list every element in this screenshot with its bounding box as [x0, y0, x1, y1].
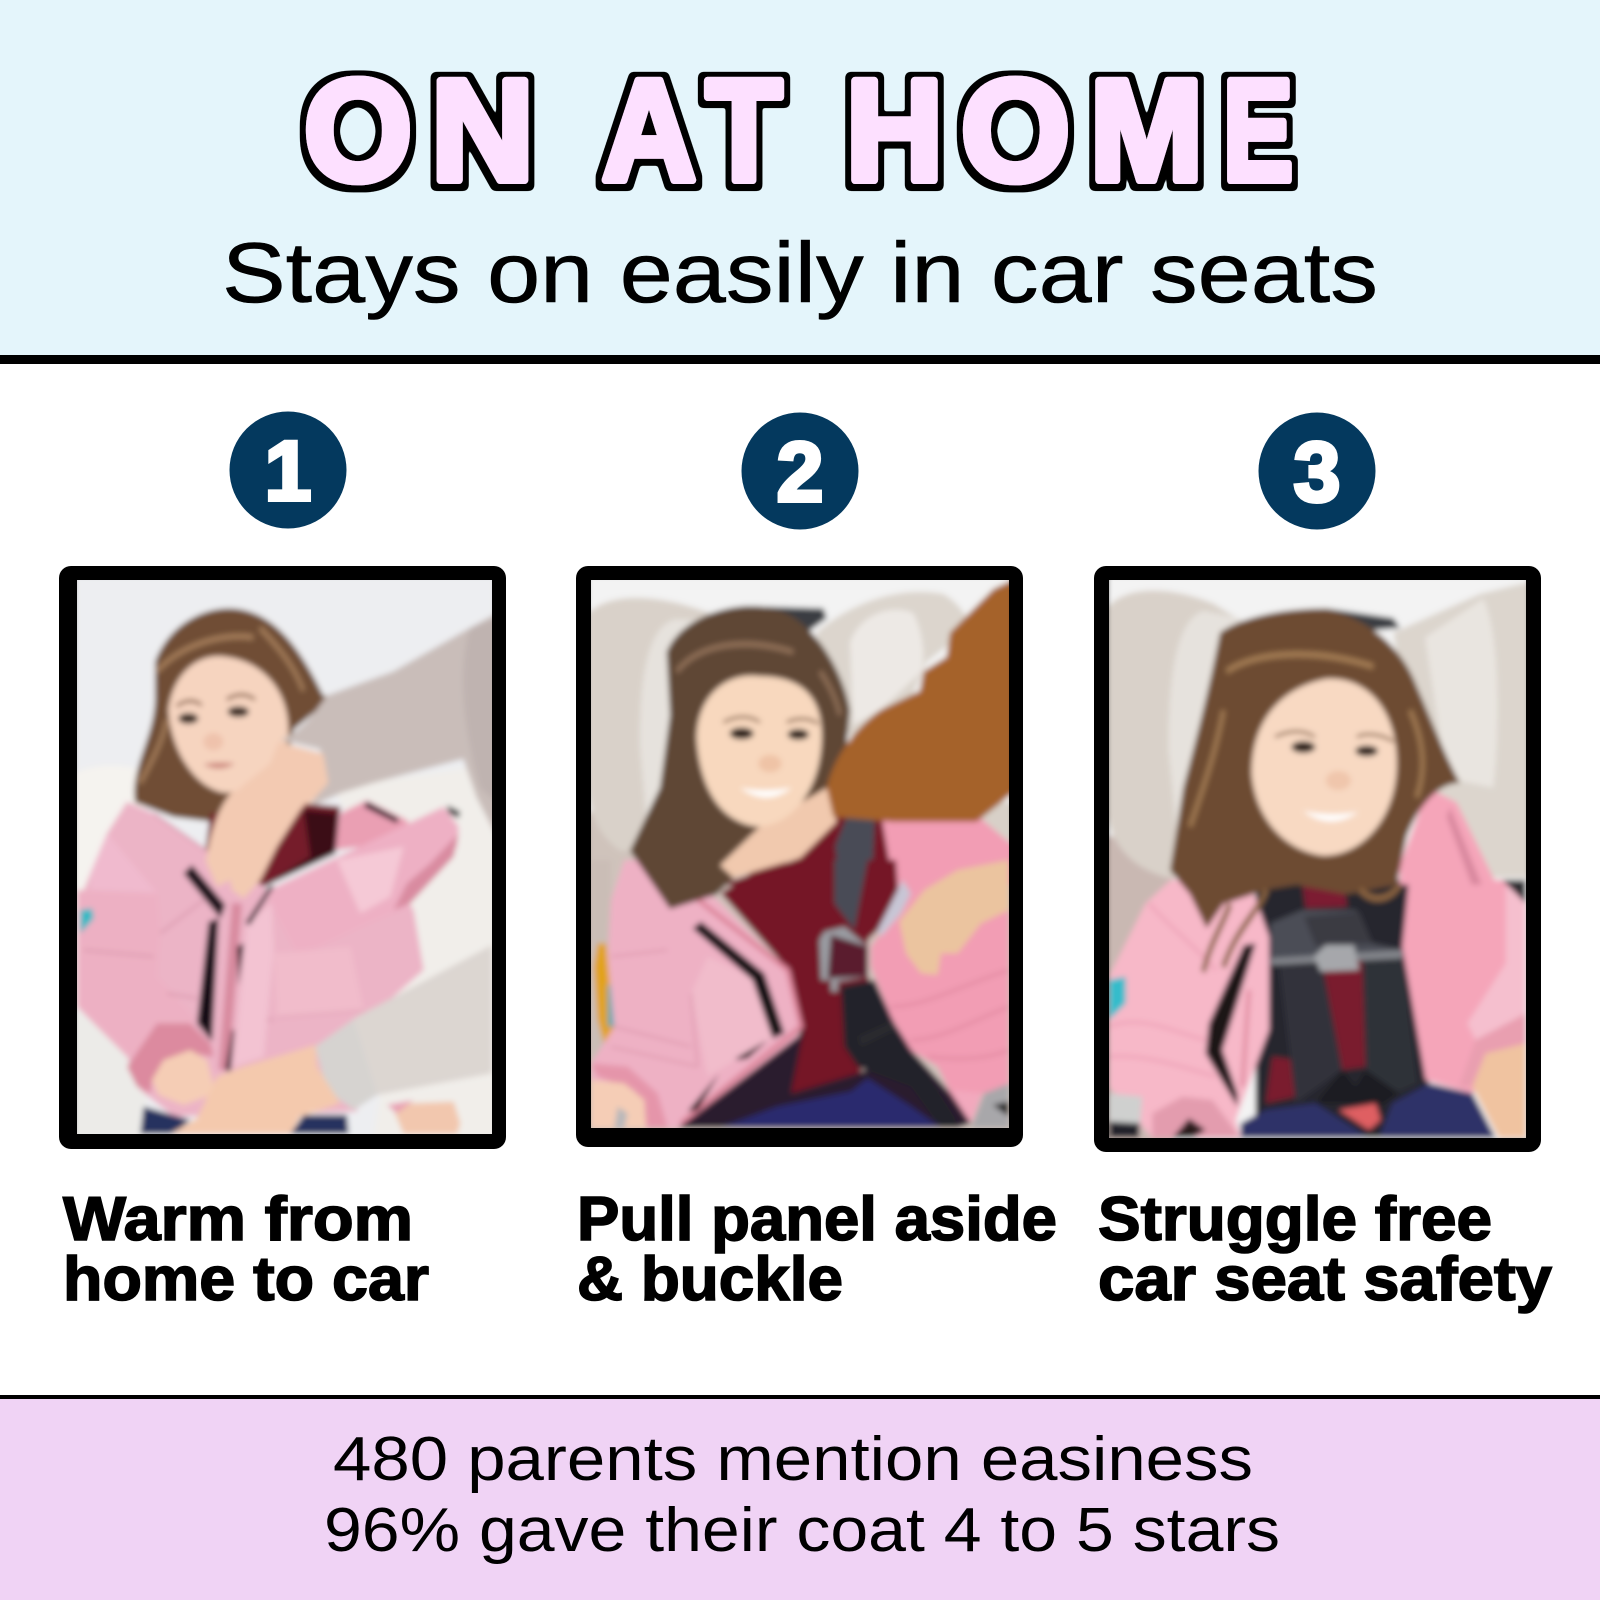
warning sticker — [594, 943, 614, 1057]
subtitle: Stays on easily in car seats — [222, 226, 1378, 321]
child hand — [1472, 1043, 1526, 1138]
child hand — [152, 1050, 215, 1105]
title: N — [431, 50, 534, 211]
footer stats text — [324, 1425, 1280, 1565]
caption: step 1 — [63, 1185, 429, 1314]
adult hand — [205, 790, 317, 898]
caption: step 2 — [577, 1185, 1057, 1314]
step 2 number badge — [742, 412, 858, 530]
child hand — [591, 1080, 646, 1128]
straps — [1279, 963, 1342, 1103]
cuff — [127, 1023, 214, 1093]
seat edge — [591, 860, 611, 1063]
buckle — [1316, 1070, 1399, 1107]
footer stats text: 96% gave their coat 4 to 5 stars — [324, 1496, 1280, 1565]
pants — [719, 1078, 941, 1128]
title: A — [602, 50, 696, 211]
right shoulder — [1400, 788, 1497, 885]
hair — [1170, 608, 1460, 928]
velcro — [688, 922, 784, 1112]
header panel — [0, 0, 1600, 356]
light sleeve — [1467, 880, 1526, 1040]
velcro strips — [184, 865, 274, 1072]
title: T — [706, 50, 782, 211]
caption: step 2: Pull panel aside — [577, 1185, 1057, 1254]
knees — [1241, 1083, 1496, 1138]
second child hand — [394, 1102, 460, 1134]
shirt — [1322, 960, 1366, 1070]
collar lining — [335, 800, 410, 850]
panel: step 1 photo frame — [59, 566, 506, 1149]
buckle — [819, 927, 868, 992]
chest clip — [1271, 910, 1402, 963]
left jacket — [1109, 880, 1269, 1138]
cuff — [591, 1063, 668, 1128]
photo: girl smiling buckled in car seat — [1107, 575, 1530, 1146]
coat body — [77, 802, 424, 1117]
step 1 number badge — [230, 412, 346, 528]
face — [1252, 679, 1397, 856]
lower sweater arm — [352, 946, 492, 1096]
header divider — [0, 355, 1600, 364]
caption: step 3 — [1098, 1185, 1553, 1314]
footer stats text: 480 parents mention easiness — [333, 1425, 1253, 1494]
hair — [630, 606, 850, 909]
title: O — [304, 50, 412, 211]
right coat base — [1402, 880, 1526, 1093]
coat front panel — [234, 903, 274, 1067]
step 1 number badge: 1 — [265, 424, 311, 518]
footer divider — [0, 1395, 1600, 1399]
title — [304, 50, 1293, 211]
title: O — [961, 50, 1070, 211]
photo: parent zipping girl's pink coat — [73, 575, 497, 1142]
red shirt — [721, 860, 903, 1097]
caption: step 1: Warm from — [63, 1185, 413, 1254]
caption: step 2: & buckle — [577, 1245, 843, 1314]
title: M — [1090, 50, 1203, 211]
face — [168, 656, 288, 793]
panel flap — [269, 805, 461, 926]
brown sleeve — [827, 579, 1013, 822]
panel: step 2 photo frame — [576, 566, 1023, 1147]
velcro — [1206, 943, 1256, 1107]
harness base — [1256, 880, 1429, 1138]
pants — [140, 1107, 349, 1134]
forearm — [170, 1045, 340, 1134]
photo: girl in car seat with coat panel pulled aside — [587, 575, 1013, 1137]
red shirt — [180, 803, 340, 887]
adult hand — [899, 860, 1009, 975]
face — [697, 676, 822, 827]
neck — [720, 788, 837, 877]
title: H — [846, 50, 943, 211]
footer panel — [0, 1399, 1600, 1600]
upper shirt, belt and fleece — [720, 817, 897, 885]
red pad — [1339, 1103, 1381, 1130]
step 2 number badge: 2 — [777, 425, 823, 519]
title: E — [1223, 50, 1293, 211]
step 3 number badge: 3 — [1294, 425, 1340, 519]
caption: step 3: car seat safety — [1098, 1245, 1553, 1314]
gray sweater upper arm — [280, 613, 497, 836]
left cuff — [1152, 1097, 1241, 1138]
right fleece — [871, 860, 1009, 1123]
caption: step 3: Struggle free — [1098, 1185, 1492, 1254]
cup — [1109, 1093, 1142, 1138]
cup — [971, 1083, 1009, 1128]
left jacket — [591, 860, 801, 1128]
belt — [834, 860, 868, 930]
sleeve — [77, 888, 86, 906]
caption: step 1: home to car — [63, 1245, 429, 1314]
wrist — [243, 742, 330, 808]
panel: step 3 photo frame — [1094, 566, 1541, 1152]
right cuff — [1459, 1013, 1526, 1087]
step 3 number badge — [1258, 412, 1376, 530]
hair — [134, 608, 333, 822]
